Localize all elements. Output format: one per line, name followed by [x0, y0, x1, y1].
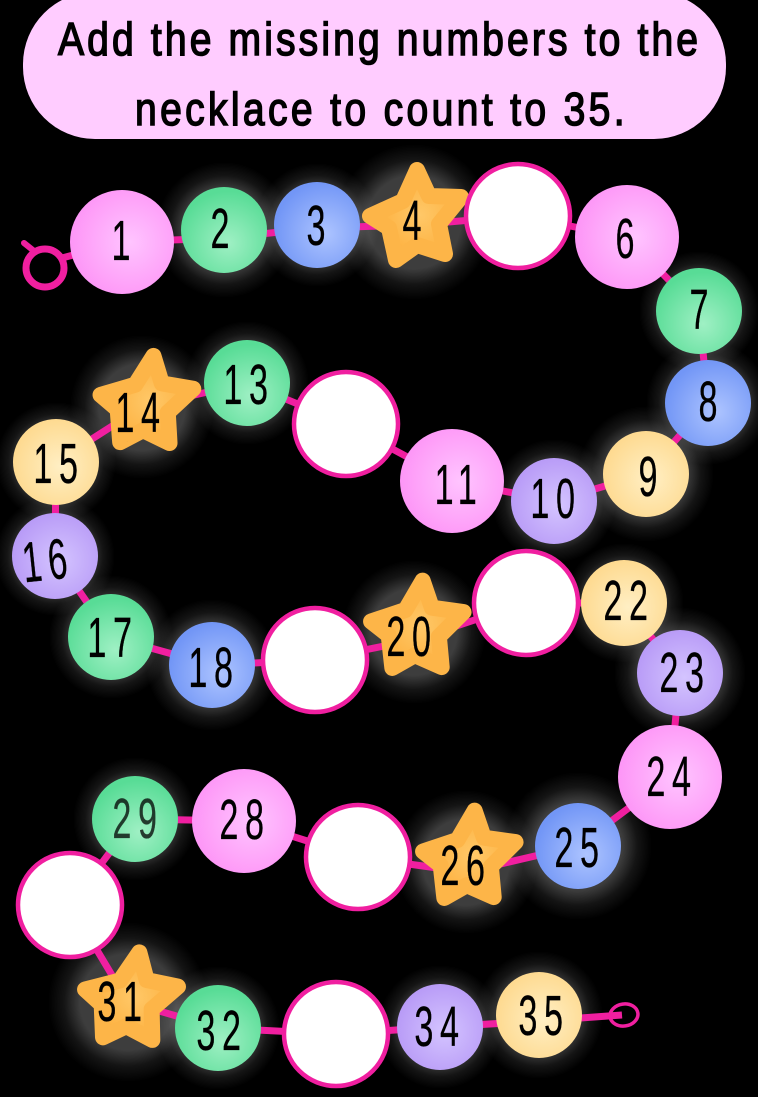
bead 17 [68, 594, 154, 680]
star bead 26 [418, 806, 518, 905]
star bead 20 [366, 576, 466, 675]
bead 24: 24 [646, 744, 698, 808]
bead 2: 2 [210, 196, 230, 260]
bead 2 [181, 187, 267, 273]
bead 6 [575, 185, 679, 289]
star bead 31: 31 [97, 969, 149, 1033]
bead 15: 15 [33, 431, 85, 495]
bead 6: 6 [615, 206, 635, 270]
clasp ring right [609, 1002, 639, 1028]
bead 34: 34 [414, 994, 466, 1058]
clasp ring left [24, 243, 64, 287]
bead 34 [397, 984, 483, 1070]
blank bead 27 [306, 805, 410, 909]
bead 13 [204, 340, 290, 426]
bead 8: 8 [698, 369, 718, 433]
star bead 20: 20 [386, 604, 438, 668]
bead 23 [637, 630, 723, 716]
bead 9: 9 [638, 444, 658, 508]
bead 28 [192, 769, 296, 873]
bead 3: 3 [306, 193, 326, 257]
bead 11 [400, 429, 504, 533]
bead 10 [511, 458, 597, 544]
title banner [23, 0, 726, 139]
star bead 31 [77, 944, 183, 1049]
bead 3 [274, 182, 360, 268]
bead 32: 32 [196, 998, 248, 1062]
necklace string [55, 216, 708, 1034]
bead 24 [618, 725, 722, 829]
title text: Add the missing numbers to the [58, 14, 698, 66]
bead 23: 23 [659, 640, 711, 704]
bead 1: 1 [111, 208, 131, 272]
bead 1 [70, 190, 174, 294]
bead 18: 18 [188, 635, 240, 699]
star bead 14 [94, 349, 197, 451]
star bead 14: 14 [115, 380, 167, 444]
bead 16: 16 [19, 525, 77, 594]
star bead 4 [370, 170, 461, 260]
blank bead 33 [284, 982, 388, 1086]
bead 25: 25 [554, 815, 606, 879]
title text: necklace to count to 35. [135, 84, 625, 136]
blank bead 21 [474, 551, 578, 655]
blank bead 5 [466, 164, 570, 268]
bead 22 [581, 560, 667, 646]
bead 28: 28 [219, 787, 271, 851]
bead 17: 17 [87, 605, 139, 669]
title text [58, 14, 698, 136]
bead 25 [535, 803, 621, 889]
bead 9 [603, 431, 689, 517]
bead 11: 11 [435, 452, 483, 516]
bead 8 [665, 360, 751, 446]
blank bead 19 [263, 608, 367, 712]
bead 29: 29 [112, 786, 164, 850]
bead 13: 13 [223, 352, 275, 416]
blank bead 12 [294, 372, 398, 476]
bead 35 [496, 972, 582, 1058]
bead 7: 7 [689, 277, 709, 341]
bead 15 [13, 419, 99, 505]
blank bead 30 [18, 853, 122, 957]
bead 10: 10 [530, 466, 582, 530]
star bead 4: 4 [402, 188, 422, 252]
bead 22: 22 [603, 568, 655, 632]
bead 29 [92, 776, 178, 862]
bead 18 [169, 622, 255, 708]
bead 7 [656, 268, 742, 354]
star bead 26: 26 [440, 833, 492, 897]
bead 16 [12, 513, 98, 599]
bead 32 [175, 985, 261, 1071]
bead 35: 35 [518, 983, 570, 1047]
